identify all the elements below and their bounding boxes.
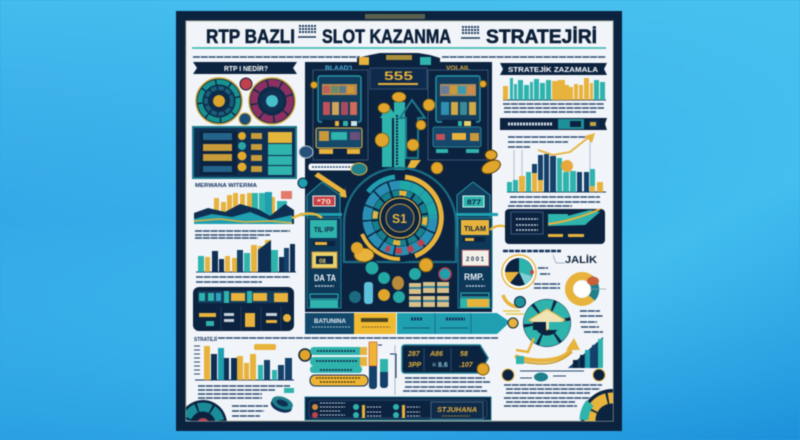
- arrows: central up down: [380, 100, 425, 170]
- panel: RTP nedir: [193, 62, 297, 178]
- kiosk: left: [300, 182, 342, 247]
- heading: strategic timing: STRATEJİK ZAZAMALA: [508, 65, 599, 74]
- rising bars: [568, 337, 603, 368]
- right tower: RMP.: [464, 272, 484, 282]
- panel: capsule list: [299, 347, 368, 386]
- tube gauges: [369, 342, 396, 395]
- bar chart: top right: [503, 78, 606, 100]
- jackpot display: [370, 68, 427, 89]
- jackpot display: 555: [384, 69, 413, 83]
- banner: central lower: BATUNINA: [314, 318, 346, 325]
- roulette wheel: S1: [392, 211, 407, 226]
- panel: stats: 58: [460, 351, 468, 358]
- title: [192, 26, 606, 57]
- top tab: [357, 53, 440, 66]
- bar chart: top left: [214, 191, 292, 220]
- title: SLOT KAZANMA: [322, 27, 451, 48]
- icon: gold coins: [310, 80, 486, 174]
- heading: strategic timing: [500, 63, 607, 75]
- heading: right lower: [503, 251, 597, 266]
- text block: [508, 137, 590, 147]
- icon: pink wheel: [249, 78, 295, 124]
- panel: central machine: [292, 53, 510, 312]
- kiosk: right: 877: [467, 200, 481, 206]
- panel: bottom legend: [305, 397, 491, 420]
- left tower: DA TA: [314, 273, 336, 283]
- kiosk: left: *70: [317, 199, 331, 206]
- banner: central lower: [305, 313, 518, 334]
- icon: large coin pile right: [479, 150, 503, 177]
- text block: [198, 386, 294, 398]
- left tower: 08: [319, 259, 326, 265]
- gauge chart: [502, 255, 536, 289]
- kiosk: right: [456, 182, 498, 247]
- label: right machine: VOLAIL: [446, 65, 470, 72]
- heading: RTP nedir: RTP I NEDİR?: [224, 64, 268, 73]
- right tower: TILAM: [464, 226, 486, 233]
- icon: coins and chips: [349, 242, 451, 307]
- text block: [196, 277, 290, 282]
- slot machine: left: [313, 70, 368, 160]
- arrow: curved gold left: [503, 295, 526, 314]
- text block: [403, 378, 490, 391]
- panel: stats: A86: [429, 351, 443, 358]
- icon: chip: [269, 394, 295, 415]
- text block: [195, 231, 290, 238]
- label: legend badge: [431, 402, 483, 419]
- panel: left chart: [193, 183, 296, 331]
- banner: right middle: [500, 118, 607, 130]
- left tower: [307, 218, 341, 308]
- chips row: [502, 369, 605, 382]
- text block: [534, 268, 560, 288]
- icon: chips near pill: [298, 146, 367, 188]
- text block: [503, 104, 604, 112]
- text block: [508, 197, 600, 206]
- bar chart: middle left: [196, 240, 296, 272]
- icon: corner wheel lower left: [185, 399, 228, 422]
- heading: right lower: JALİK: [565, 253, 597, 266]
- bar chart: right middle: [507, 133, 606, 192]
- text block: [580, 311, 603, 332]
- panel: stats: 287: [407, 351, 421, 358]
- right tower: 2001: [466, 257, 485, 263]
- icon: chips: [239, 78, 252, 125]
- label pill: [308, 163, 357, 171]
- title: STRATEJİRİ: [486, 27, 597, 48]
- icon: teal wheel: [196, 78, 242, 124]
- panel: stats: .107: [459, 362, 474, 369]
- panel: comparison table: [193, 127, 296, 178]
- panel: dark insert: [505, 209, 605, 244]
- donut chart: [569, 276, 606, 302]
- area chart: [194, 204, 294, 224]
- arrow: swoosh with label: [515, 338, 580, 364]
- heading: lower left: STRATEJİ: [194, 336, 218, 343]
- label: legend badge: STJUHANA: [437, 405, 477, 414]
- panel: lower left strategy: [185, 336, 499, 422]
- title: RTP BAZLI: [206, 27, 295, 48]
- bar chart: lower left: [194, 344, 294, 380]
- right tower: [458, 218, 492, 308]
- panel: stats: [402, 345, 489, 375]
- big wheel: [516, 299, 571, 352]
- text block: [232, 406, 268, 416]
- panel: dark summary: [193, 287, 294, 331]
- left tower: TIL IPP: [314, 227, 334, 234]
- text block: [504, 385, 602, 406]
- arrow: yellow left: [314, 172, 347, 198]
- panel: stats: ≡ 8.6: [432, 362, 448, 369]
- slot machine: right: [428, 70, 488, 160]
- poster frame: [176, 11, 622, 431]
- arrows: side yellow: [292, 214, 510, 230]
- panel: stats: 3PP: [408, 362, 422, 369]
- panel: right strategic timing: [499, 62, 614, 422]
- label: left machine: BLAAD'I: [325, 66, 352, 72]
- heading: left chart: MERWANA WITERMA: [195, 183, 257, 189]
- roulette wheel: [344, 168, 456, 262]
- icon: corner wheel right: [578, 388, 614, 422]
